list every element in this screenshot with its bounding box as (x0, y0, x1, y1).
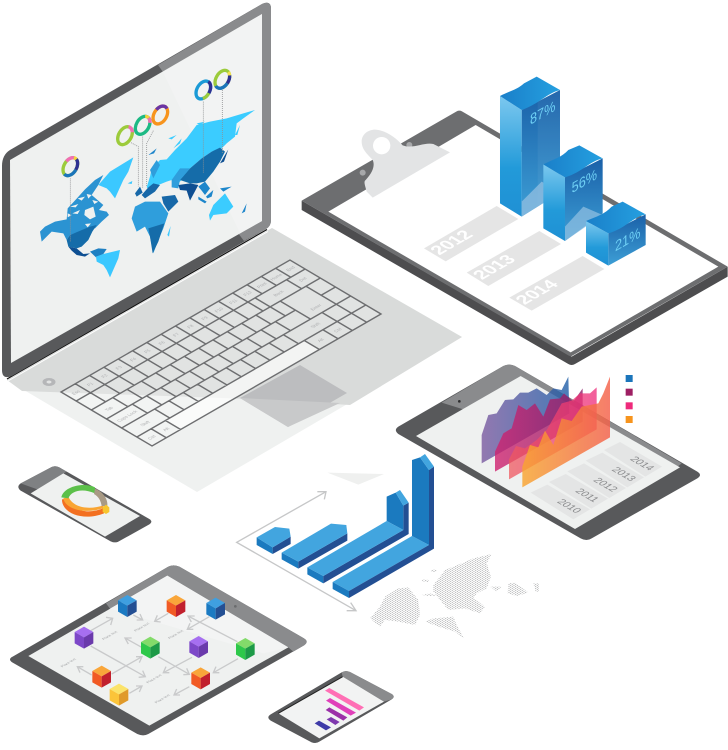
year pad 2013 (467, 231, 561, 286)
laptop screen (10, 14, 262, 363)
area series 4 (522, 377, 610, 487)
clipboard (302, 77, 728, 365)
laptop (2, 3, 462, 492)
diagram captions: Place text (154, 694, 171, 704)
paper (328, 125, 718, 352)
year pad 2010: 2010 (554, 498, 583, 515)
year pad 2012: 2012 (425, 227, 477, 257)
touchpad (240, 365, 347, 427)
south america (96, 250, 120, 277)
diagram captions (60, 622, 184, 704)
australia (209, 193, 233, 221)
area series 1 (482, 377, 569, 463)
africa (132, 202, 168, 253)
bar one (257, 527, 291, 554)
donut chart (61, 485, 109, 517)
bar two (282, 524, 347, 569)
horizontal bars (315, 688, 364, 730)
3d bar 56% (543, 145, 603, 241)
clip (360, 130, 450, 198)
world map (40, 68, 255, 277)
keyboard (61, 260, 381, 446)
cube purple (189, 636, 208, 658)
year pad 2012: 2012 (590, 477, 620, 494)
laptop base (7, 228, 462, 492)
india (178, 183, 198, 201)
tablet with area chart (396, 365, 700, 540)
phone with bar chart (268, 671, 394, 743)
japan (220, 149, 228, 163)
diagram captions: Place text (60, 658, 77, 668)
arctic islands (168, 122, 240, 148)
phone screen (278, 677, 384, 738)
donut ring: europe three (150, 103, 171, 127)
laptop base shaded area (7, 228, 462, 405)
dotted world map (370, 554, 539, 638)
donut ring: europe one (115, 124, 135, 147)
tablet body (396, 365, 700, 540)
central asia (172, 168, 190, 188)
year pad 2012 (424, 206, 518, 261)
3d bar 21% (586, 202, 646, 266)
area series 2 (495, 388, 583, 472)
cube blue (118, 595, 137, 617)
board (302, 111, 728, 365)
year pad 2011: 2011 (572, 487, 601, 504)
pointer lines (70, 90, 222, 242)
europe (135, 183, 160, 198)
area series 3 (509, 387, 597, 479)
year pad 2013: 2013 (608, 466, 638, 483)
year pad 2010 (531, 485, 590, 519)
svalbard (148, 148, 157, 155)
area chart (482, 377, 610, 487)
3d bar 87% (500, 77, 560, 217)
cube yellow (110, 684, 128, 706)
chart axes (237, 492, 356, 611)
greenland (98, 157, 133, 198)
eurasia, africa, oceania (132, 110, 255, 253)
bar three (307, 490, 409, 583)
year pad 2014: 2014 (627, 455, 656, 472)
diagram captions: Place text (133, 622, 150, 632)
diagram captions: Place text (101, 630, 118, 641)
year pad 2014 (509, 256, 604, 311)
phone with donut chart (18, 466, 151, 542)
china and east asia (180, 148, 225, 183)
year pad 2013: 2013 (468, 252, 520, 282)
key labels (70, 265, 372, 441)
year pad 2013 (586, 453, 644, 487)
cube blue (206, 598, 225, 620)
year pad 2014 (604, 442, 662, 477)
year pad 2012 (567, 463, 626, 498)
donut ring: americas (60, 155, 81, 178)
3d bar 21%: 21% (615, 225, 640, 256)
tablet with cube flow diagram (10, 565, 307, 735)
phone body (18, 466, 151, 542)
central isometric bar chart (237, 454, 539, 638)
cube orange (167, 595, 185, 617)
year pad 2014: 2014 (511, 277, 563, 307)
cube orange (191, 667, 210, 689)
3d bar 87%: 87% (530, 98, 555, 129)
tablet screen (28, 576, 288, 726)
cube green (236, 638, 255, 660)
tablet screen (416, 376, 680, 529)
donut ring: east asia (212, 68, 233, 91)
russia and north asia (147, 110, 255, 192)
southeast asia (198, 182, 232, 203)
cube orange (92, 666, 111, 688)
tablet body (10, 565, 307, 735)
floor shadow (327, 473, 384, 485)
hinge line (7, 230, 268, 381)
north america (40, 175, 109, 257)
middle east (162, 195, 178, 212)
donut ring: russia (193, 78, 214, 102)
connector arrows (77, 613, 238, 695)
3d bar 56%: 56% (572, 167, 597, 197)
phone screen (31, 473, 140, 537)
bar four (333, 454, 434, 598)
chart legend (626, 375, 633, 423)
year pad 2011 (549, 474, 608, 509)
cube green (141, 637, 160, 659)
diagram captions: Place text (145, 674, 163, 684)
diagram captions: Place text (167, 629, 184, 640)
phone body (268, 671, 394, 743)
power button (42, 378, 56, 386)
laptop lid bezel (2, 3, 271, 377)
cube purple (75, 627, 93, 649)
donut ring: europe two (132, 114, 153, 137)
